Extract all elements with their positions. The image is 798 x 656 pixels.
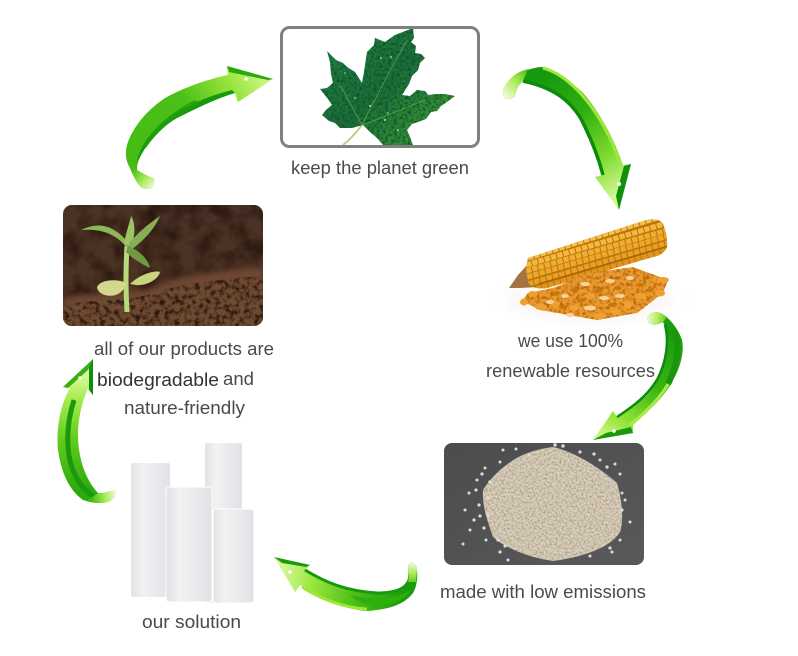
caption: all of our products are biodegradable and nature-friendly <box>94 338 274 418</box>
caption: all of our products are biodegradable and nature-friendly: biodegradable <box>97 369 219 390</box>
caption: all of our products are biodegradable and nature-friendly: and <box>223 368 254 389</box>
caption: all of our products are biodegradable and nature-friendly: nature-friendly <box>124 397 246 418</box>
arrow: lower left, rolls to seedling <box>58 359 116 503</box>
caption: our solution: our solution <box>142 611 241 632</box>
caption: we use 100% renewable resources: we use 100% <box>517 330 623 351</box>
illustration: left roll <box>131 463 170 597</box>
infographic: product lifecycle cycle <box>58 26 683 628</box>
caption: we use 100% renewable resources <box>486 330 655 381</box>
illustration: front right roll <box>213 509 254 603</box>
illustration: corn cob <box>526 219 668 288</box>
icon: maple leaf <box>320 28 455 145</box>
panel: plastic roll product photo <box>131 443 254 603</box>
caption: keep the planet green: keep the planet green <box>291 157 469 178</box>
illustration: soil clumps <box>63 268 263 326</box>
illustration: corn kernels pile <box>520 267 669 320</box>
illustration: stray pellets <box>462 443 632 562</box>
illustration: seedling <box>81 216 160 312</box>
illustration: centre roll <box>166 487 212 602</box>
panel: corn cob and kernels photo <box>509 219 669 320</box>
caption: all of our products are biodegradable and nature-friendly: all of our products are <box>94 338 274 359</box>
panel: seedling in soil photo <box>63 205 263 326</box>
arrow: top right, leaf to corn <box>503 67 631 210</box>
illustration: corn husk tip <box>509 264 538 288</box>
arrow: right middle, corn to pellets <box>593 312 683 440</box>
panel: bio-resin pellets photo <box>444 443 644 565</box>
illustration: pellet pile <box>483 447 622 561</box>
panel: maple leaf photo in grey frame <box>282 28 478 146</box>
caption: we use 100% renewable resources: renewable resources <box>486 360 655 381</box>
arrow: bottom, pellets to rolls <box>274 557 417 611</box>
illustration: back roll <box>205 443 242 603</box>
caption: made with low emissions: made with low emissions <box>440 581 646 602</box>
arrow: top left, seedling to leaf <box>126 66 273 189</box>
